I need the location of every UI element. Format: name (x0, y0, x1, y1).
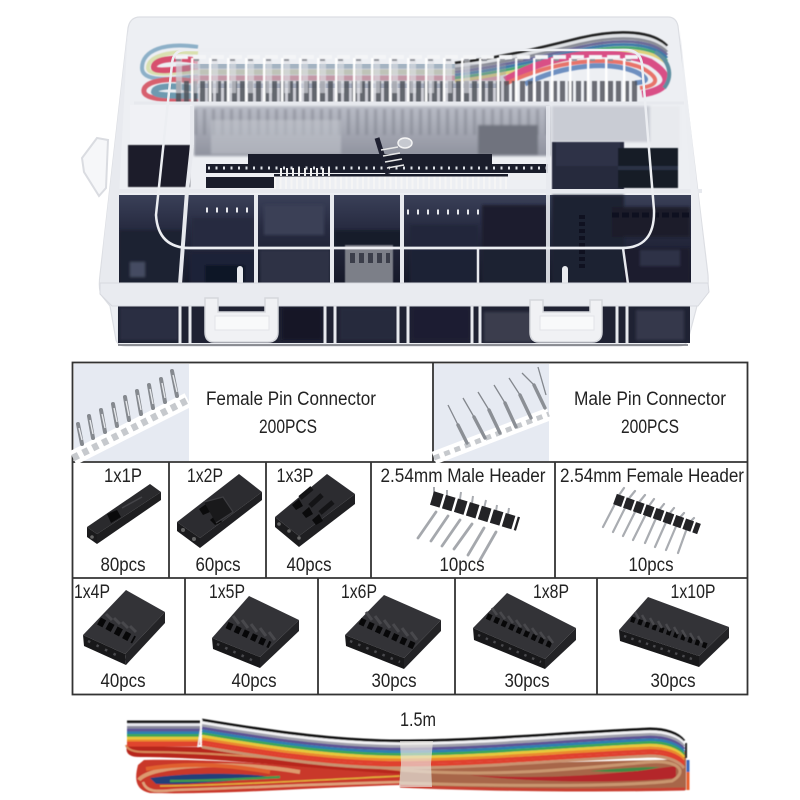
cell: 1x10P (619, 582, 729, 692)
length label: 1.5m (400, 710, 436, 731)
icon: 1x5P housing (212, 596, 299, 668)
icon: 1x10P housing (619, 597, 729, 667)
icon: 1x6P housing (345, 595, 441, 669)
ribbon cable left fragment (142, 46, 198, 100)
front latch right (530, 300, 602, 342)
quantity: male pin: 200PCS (621, 417, 679, 438)
dark connectors in lower compartments (119, 195, 691, 284)
quantity: 1x1P: 80pcs (100, 555, 146, 576)
icon: 1x3P housing (275, 474, 355, 547)
front latch left (205, 298, 278, 342)
quantity: 1x2P: 60pcs (196, 555, 240, 576)
cell: 1x8P (473, 582, 576, 692)
cell: 1x5P (209, 582, 299, 692)
quantity: 1x10P: 30pcs (650, 671, 696, 692)
rainbow ribbon cable (126, 710, 688, 793)
cable coil (126, 720, 688, 793)
label: female header: 2.54mm Female Header (560, 466, 745, 487)
pin header strips (206, 138, 548, 188)
icon: 1x2P housing (177, 474, 262, 548)
left frame strip (100, 28, 128, 284)
table grid (72, 362, 748, 695)
right frame strip (680, 30, 708, 284)
quantity: female pin: 200PCS (259, 417, 317, 438)
quantity: male header: 10pcs (440, 555, 484, 576)
front lip of box (100, 283, 709, 306)
label: 1x10P: 1x10P (670, 582, 716, 603)
icon: 1x1P housing (87, 484, 161, 544)
cell: 1x2P (177, 466, 262, 576)
quantity: female header: 10pcs (628, 555, 674, 576)
ribbon cable right arch (455, 33, 669, 94)
cell: male header (380, 466, 546, 576)
cell: 1x6P (341, 582, 441, 692)
label: 1x1P: 1x1P (104, 466, 142, 487)
back left fold (126, 722, 400, 774)
compartment dividers (110, 103, 702, 343)
white pegs (240, 269, 565, 282)
quantity: 1x4P: 40pcs (100, 671, 146, 692)
label: 1x4P: 1x4P (74, 582, 110, 603)
icon: 1x8P housing (473, 593, 576, 669)
cell: 1x3P (275, 466, 355, 576)
icon: female header (603, 488, 699, 553)
label: 1x8P: 1x8P (533, 582, 569, 603)
label: 1x3P: 1x3P (276, 466, 314, 487)
dark connectors in front band (118, 305, 690, 343)
grey terminal bag, middle band (194, 106, 680, 156)
label: 1x5P: 1x5P (209, 582, 245, 603)
photo: female terminals (73, 364, 189, 461)
cell: female header (560, 466, 745, 576)
photo: male terminals (434, 364, 549, 461)
label: 1x2P: 1x2P (187, 466, 223, 487)
quantity: 1x5P: 40pcs (232, 671, 276, 692)
storage box photo (82, 17, 709, 346)
cell: 1x4P (74, 582, 165, 692)
panel: male pin connector (434, 364, 727, 461)
label: male pin connector: Male Pin Connector (574, 389, 727, 410)
front main band (198, 720, 684, 768)
label: male header: 2.54mm Male Header (380, 466, 546, 487)
bottom edge (118, 344, 688, 346)
dark connectors upper left (128, 145, 190, 187)
quantity: 1x6P: 30pcs (372, 671, 416, 692)
panel: female pin connector (73, 364, 377, 461)
tape (399, 741, 433, 787)
metal terminals grey lower part (175, 57, 640, 104)
pale compartments under terminals (130, 105, 192, 145)
ribbon cable passing behind terminals (190, 66, 500, 86)
label: female pin connector: Female Pin Connector (206, 389, 377, 410)
right return loop (400, 743, 688, 791)
cell: 1x1P (87, 466, 161, 576)
lower left loop (136, 760, 400, 793)
icon: 1x4P housing (83, 590, 165, 665)
inner clear tray (156, 50, 654, 248)
left hinge tab (82, 138, 108, 196)
icon: male header (418, 487, 518, 560)
quantity: 1x8P: 30pcs (504, 671, 550, 692)
box lid and body (99, 17, 708, 346)
dark connectors upper right (552, 142, 678, 190)
parts table (72, 362, 748, 695)
label: 1x6P: 1x6P (341, 582, 377, 603)
quantity: 1x3P: 40pcs (286, 555, 332, 576)
